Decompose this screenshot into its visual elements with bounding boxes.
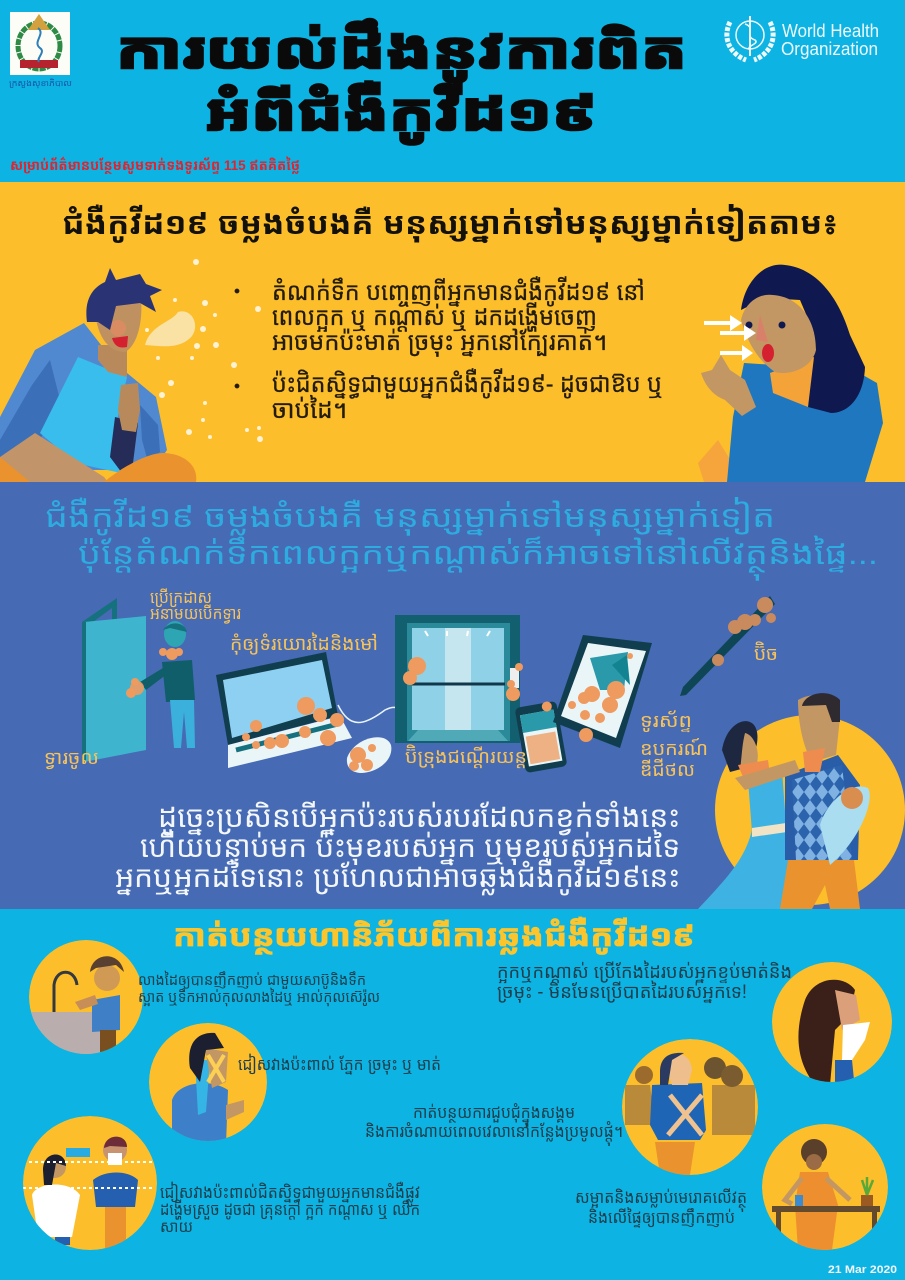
heading: reduce risk: កាត់បន្ថយហានិភ័យពីការឆ្លងជំងឺកូវីដ១៩ (173, 916, 695, 955)
labels: object names: ប៊ិទ្រុងជណ្តើរយន្ត (405, 745, 527, 768)
illustration: laptop (216, 652, 402, 768)
illustration: family (698, 693, 905, 909)
text: avoid crowds: កាត់បន្ថយការជួបជុំក្នុងសង្គម (413, 1102, 575, 1128)
illustration: cleaning table (762, 1124, 888, 1250)
text: warning message: ដូច្នេះប្រសិនបើអ្នកប៉ះរបស់របរដែលកខ្វក់ទាំងនេះ (158, 800, 680, 836)
text: avoid touching: ជៀសវាងប៉ះពាល់ ភ្នែក ច្រមុះ ឬ មាត់ (238, 1053, 441, 1075)
illustration: washing hands (29, 940, 143, 1060)
icon: WHO logo (727, 16, 879, 60)
text: cover cough: ច្រមុះ - មិនមែនប្រើបាតដៃរបស់អ្នកទេ! (497, 981, 747, 1004)
hotline text: សម្រាប់ព័ត៌មានបន្ថែមសូមទាក់ទងទូរស័ព្ទ 115 ឥតគិតថ្លៃ (10, 157, 300, 174)
illustration: elevator (395, 615, 523, 743)
text: wash hands: លាងដៃឲ្យបានញឹកញាប់ ជាមួយសាប៊ូនិងទឹក (138, 971, 366, 989)
illustration: keep distance (23, 1116, 157, 1252)
text: bullet list: អាចមកប៉ះមាត់ ច្រមុះ អ្នកនៅក្បែរគាត់។ (272, 328, 607, 358)
labels: object names (44, 587, 778, 781)
illustration: cough into elbow (772, 962, 892, 1090)
panel: surfaces (0, 482, 905, 910)
illustration: tablet (553, 635, 652, 748)
heading: spread: ជំងឺកូវីដ១៩ ចម្លងចំបងគឺ មនុស្សម្នាក់ទៅមនុស្សម្នាក់ទៀតតាម៖ (62, 204, 838, 244)
labels: object names: ឧបករណ៍ (640, 738, 708, 760)
panel: reduce risk (0, 909, 905, 1280)
icon: ministry of health logo (9, 12, 72, 89)
text: wash hands (138, 971, 380, 1006)
text: bullet list: ចាប់ដៃ។ (272, 393, 347, 424)
title: ការយល់ដឹងនូវការពិត (116, 20, 687, 82)
illustration: woman avoiding cough (698, 265, 883, 482)
text: clean surfaces: និងលើផ្ទៃឲ្យបានញឹកញាប់ (588, 1207, 735, 1228)
text: avoid crowds: និងការចំណាយពេលវេលានៅកន្លែងប្រមូលផ្តុំ។ (365, 1120, 623, 1147)
text: warning message (115, 800, 680, 896)
icon: WHO logo: World Health (782, 21, 879, 41)
text: warning message: អ្នកឬអ្នកដទៃនោះ ប្រហែលជាអាចឆ្លងជំងឺកូវីដ១៩នេះ (115, 857, 680, 896)
panel: how the disease spreads (0, 182, 905, 482)
illustration: man at door (126, 621, 195, 748)
text: bullet list: តំណក់ទឹក បញ្ចេញពីអ្នកមានជំងឺកូវីដ១៩ នៅ (272, 274, 645, 308)
text: avoid crowds (365, 1102, 623, 1147)
labels: object names: ទូរស័ព្ទ (640, 711, 692, 732)
text: cover cough (497, 961, 792, 1004)
text: keep distance: ជៀសវាងប៉ះពាល់ជិតស្និទ្ធជាមួយអ្នកមានជំងឺផ្លូវ (160, 1181, 420, 1207)
text: keep distance: សាយ (160, 1219, 193, 1236)
text: clean surfaces (575, 1187, 747, 1228)
droplets (145, 259, 263, 442)
text: keep distance (160, 1181, 420, 1236)
labels: object names: ឌីជីថល (640, 758, 695, 781)
heading: surfaces: ជំងឺកូវីដ១៩ ចម្លងចំបងគឺ មនុស្សម្នាក់ទៅមនុស្សម្នាក់ទៀត (45, 497, 775, 536)
date: 21 Mar 2020 (828, 1264, 897, 1276)
panel: header (0, 0, 905, 183)
illustration: door (82, 598, 146, 762)
text: bullet list (235, 274, 663, 424)
text: keep distance: ដង្ហើមស្រួច ដូចជា គ្រុនក្តៅ ក្អក កណ្តាស ឬ ឈឺក (160, 1198, 420, 1220)
illustration: smartphone (514, 700, 567, 773)
labels: object names: ប្រើក្រដាស (150, 587, 212, 608)
text: clean surfaces: សម្អាតនិងសម្លាប់មេរោគលើវត្ថុ (575, 1187, 747, 1213)
labels: object names: អនាមយបើកទ្វារ (150, 603, 241, 624)
text: bullet list: ប៉ះជិតស្និទ្ធជាមួយអ្នកជំងឺកូវីដ១៩- ដូចជាឱប ឬ (272, 366, 663, 400)
icon: ministry of health logo: ក្រសួងសុខាភិបាល (9, 78, 72, 89)
heading: surfaces (45, 497, 878, 581)
title (116, 20, 687, 144)
illustration: mouse (347, 737, 391, 773)
illustration: avoid touching face (149, 1023, 267, 1145)
text: warning message: ហើយបន្ទាប់មក ប៉ះមុខរបស់អ្នក ឬមុខរបស់អ្នកដទៃ (140, 828, 680, 866)
heading: surfaces: ប៉ុន្តែតំណក់ទឹកពេលក្អកឬកណ្តាស់ក៏អាចទៅនៅលើវត្ថុនិងផ្ទៃ... (78, 535, 878, 581)
text: wash hands: ស្អាត ឬទឹកអាល់កុលលាងដៃឬ អាល់កុលស៊េរ៉ូល (138, 988, 380, 1006)
text: bullet list: ពេលក្អក ឬ កណ្តាស់ ឬ ដកដង្ហើមចេញ (272, 300, 597, 333)
labels: object names: ប៊ិច (754, 642, 778, 665)
title: អំពីជំងឺកូវីដ១៩ (205, 82, 597, 144)
icon: WHO logo: Organization (781, 39, 878, 59)
illustration: coughing man (0, 268, 196, 482)
text: cover cough: ក្អកឬកណ្តាស់ ប្រើកែងដៃរបស់អ្នកខ្ទប់មាត់និង (497, 961, 792, 983)
illustration: pen (680, 596, 776, 696)
labels: object names: ទ្វារចូល (44, 748, 99, 769)
illustration: avoid crowds (622, 1039, 758, 1175)
labels: object names: កុំឲ្យទំរយោរដៃនិងមៅ (230, 633, 378, 656)
